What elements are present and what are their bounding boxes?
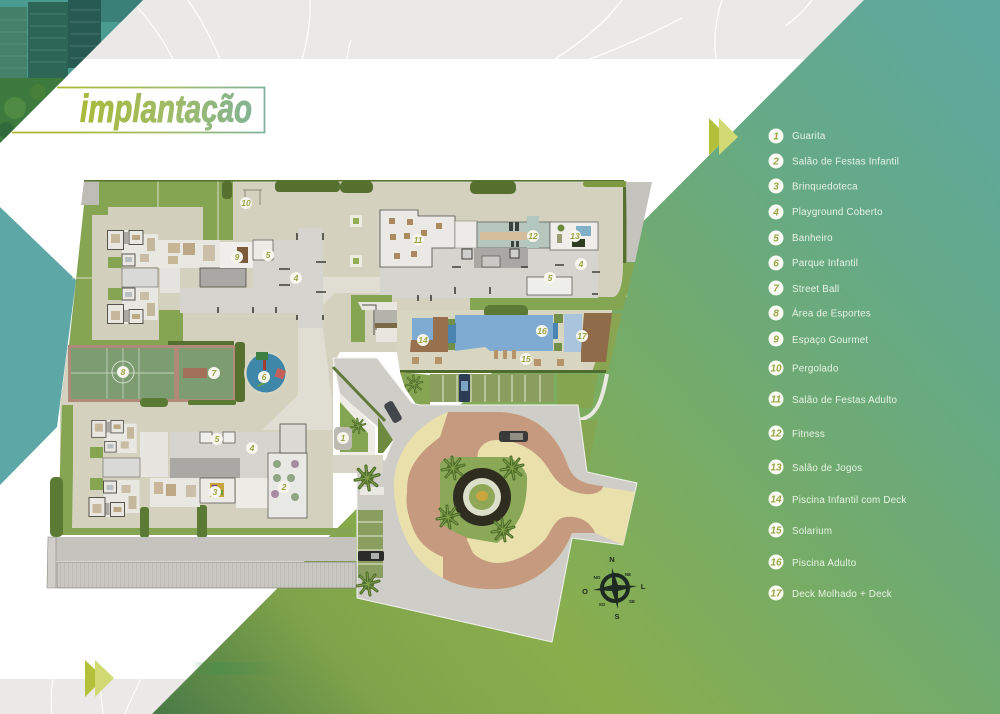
- marker 1: [337, 432, 349, 444]
- marker 12: 12: [528, 231, 538, 241]
- legend item 14: Piscina Infantil com Deck: [792, 495, 906, 506]
- bottom grey band with white contour lines: [0, 679, 190, 714]
- marker 7: 7: [212, 368, 218, 378]
- party hall adult: [380, 210, 477, 267]
- top arrows: [709, 118, 738, 155]
- pool deck: [397, 310, 612, 372]
- west core: [200, 268, 246, 287]
- compass rose: [582, 555, 646, 621]
- lawn dividers: [72, 181, 218, 278]
- bottom arrows: [85, 660, 114, 697]
- marker 1: 1: [341, 433, 346, 443]
- marker 10: [240, 197, 252, 209]
- fountain: [453, 468, 511, 526]
- pool deck south hedge: [400, 370, 606, 373]
- gourmet space: [220, 240, 273, 268]
- east bathroom: [527, 277, 572, 295]
- marker 15: [520, 353, 532, 365]
- marker 7: [208, 367, 220, 379]
- compass rose: O: [582, 587, 588, 596]
- marker 14: 14: [418, 335, 428, 345]
- legend item 8: Área de Esportes: [792, 308, 871, 320]
- marker 4 west: 4: [293, 273, 299, 283]
- game room: [550, 222, 598, 250]
- marker 2: 2: [281, 482, 287, 492]
- legend item 9: Espaço Gourmet: [792, 335, 868, 346]
- lawn and building L: [351, 295, 397, 342]
- planters north: [350, 215, 362, 267]
- lawn at parking west: [400, 372, 430, 410]
- marker 5 south: 5: [215, 434, 220, 444]
- roundabout cream paving: [394, 412, 635, 589]
- east grey strip: [626, 182, 652, 262]
- marker 17: [576, 330, 588, 342]
- legend item 17: Deck Molhado + Deck: [792, 589, 892, 600]
- darker band on panel: [192, 662, 287, 675]
- legend item 10: Pergolado: [792, 364, 839, 374]
- wet deck: [581, 313, 612, 362]
- marker 4 south: 4: [249, 443, 255, 453]
- marker 3: 3: [213, 487, 218, 497]
- tower photo corner: [0, 0, 143, 143]
- compass rose: L: [641, 582, 646, 591]
- legend item 15: [768, 522, 832, 538]
- pool hedge: [484, 305, 528, 319]
- south roof strip: [57, 562, 356, 588]
- legend item 16: 16: [770, 558, 782, 568]
- sports court: [68, 345, 236, 402]
- legend item 11: Salão de Festas Adulto: [792, 395, 898, 406]
- party hall children: [236, 424, 307, 518]
- marker 2: [278, 481, 290, 493]
- legend item 5: Banheiro: [792, 233, 833, 244]
- legend item 4: 4: [772, 208, 779, 218]
- legend item 15: Solarium: [792, 526, 832, 537]
- teal triangle left: [0, 207, 76, 485]
- walkways: [262, 277, 380, 430]
- court side hedge: [235, 342, 245, 402]
- legend item 16: [768, 554, 857, 570]
- marker 10: 10: [241, 198, 251, 208]
- right pool: [553, 314, 582, 352]
- inner west pavement: [92, 207, 203, 340]
- north boundary and hedges: [84, 180, 627, 345]
- marker 16: [536, 325, 548, 337]
- marker 16: 16: [537, 326, 547, 336]
- legend item 2: Salão de Festas Infantil: [792, 156, 899, 168]
- marker 8: [117, 366, 129, 378]
- south wing apartments: [88, 420, 200, 517]
- marker 5 south: [211, 433, 223, 445]
- legend item 7: Street Ball: [792, 284, 839, 295]
- south core: [170, 458, 240, 478]
- marker 14: [417, 334, 429, 346]
- east lawn strip: [470, 263, 635, 310]
- lawn patch east: [571, 420, 598, 470]
- legend item 6: Parque Infantil: [792, 258, 858, 269]
- legend item 5: 5: [773, 234, 779, 244]
- legend item 8: 8: [773, 308, 779, 320]
- south covered playground: [162, 432, 307, 478]
- legend item 8: [768, 306, 871, 320]
- site plan: [47, 180, 652, 642]
- legend item 17: [768, 586, 892, 600]
- legend item 3: 3: [773, 182, 779, 192]
- legend item 3: Brinquedoteca: [792, 182, 858, 192]
- compass rose: SO: [599, 602, 606, 607]
- lawn beside parking: [557, 374, 598, 408]
- legend item 11: 11: [771, 394, 782, 406]
- title: implantação: [80, 88, 252, 131]
- legend item 13: 13: [770, 462, 782, 474]
- top grey band with white contour lines: [0, 0, 880, 59]
- compass rose: NO: [594, 575, 601, 580]
- guardhouse area: [333, 367, 393, 495]
- children deck: [410, 317, 448, 352]
- legend item 7: 7: [773, 284, 779, 294]
- compass rose: N: [609, 555, 615, 564]
- west roof edge: [47, 537, 56, 588]
- column marks east: [418, 265, 600, 301]
- parking west: [358, 510, 383, 578]
- parking top: [430, 374, 554, 402]
- legend item 2: [768, 154, 899, 168]
- deck lawn: [592, 313, 622, 372]
- title box: [12, 88, 264, 132]
- side pool steps: [448, 323, 456, 343]
- legend item 13: [768, 460, 862, 474]
- legend item 12: 12: [770, 428, 782, 440]
- marker 15: 15: [521, 354, 531, 364]
- small lawn squares: [90, 257, 122, 490]
- marker 13: [569, 230, 581, 242]
- south pavement edges: [58, 405, 353, 535]
- compass rose: S: [614, 612, 620, 621]
- east playground: [380, 248, 598, 298]
- marker 6: [258, 371, 270, 383]
- plan number markers: [117, 197, 588, 498]
- west covered playground: [180, 228, 323, 328]
- legend item 3: [768, 178, 858, 194]
- south white hall: [140, 432, 168, 477]
- legend item 17: 17: [770, 588, 782, 600]
- legend item 10: 10: [770, 364, 782, 374]
- central garden: [440, 457, 527, 543]
- legend item 11: [768, 392, 898, 406]
- legend item 4: [768, 204, 883, 220]
- legend item 1: 1: [773, 132, 779, 142]
- adult pool: [455, 315, 553, 351]
- planters near pool: [448, 314, 563, 351]
- legend item 1: [768, 128, 826, 144]
- roundabout pink paving: [406, 412, 603, 589]
- deck chairs: [412, 350, 564, 366]
- corner grey box: [81, 181, 99, 205]
- compass rose: SE: [629, 599, 635, 604]
- marker 9: 9: [235, 252, 240, 262]
- marker 5 east: 5: [548, 273, 553, 283]
- legend item 16: Piscina Adulto: [792, 558, 857, 569]
- palms: [351, 376, 523, 595]
- marker 5 west: 5: [266, 250, 271, 260]
- children park: [244, 351, 288, 395]
- marker 5 west: [262, 249, 274, 261]
- legend item 12: Fitness: [792, 429, 825, 440]
- pavement base: [60, 181, 627, 528]
- marker 4 south: [246, 442, 258, 454]
- legend item 14: 14: [770, 494, 782, 506]
- legend item 1: Guarita: [792, 131, 826, 142]
- marker 17: 17: [577, 331, 588, 341]
- white curb east: [578, 374, 607, 420]
- west lawn: [69, 181, 233, 345]
- compass rose: NE: [625, 572, 631, 577]
- legend item 13: Salão de Jogos: [792, 463, 862, 474]
- marker 13: 13: [570, 231, 580, 241]
- marker 11: 11: [414, 235, 423, 245]
- lawn by wing: [159, 310, 183, 341]
- marker 4 west: [290, 272, 302, 284]
- legend item 7: [768, 280, 839, 296]
- legend item 5: [768, 230, 833, 246]
- fitness: [477, 216, 550, 248]
- legend item 4: Playground Coberto: [792, 207, 883, 218]
- marker 11: [412, 234, 424, 246]
- west wing apartments: [107, 230, 220, 324]
- east hedge line: [623, 187, 626, 263]
- legend item 2: 2: [772, 156, 779, 168]
- marker 4 east: 4: [578, 259, 584, 269]
- children pool: [412, 318, 434, 342]
- south bathroom: [200, 432, 235, 443]
- marker 3: [209, 486, 221, 498]
- legend item 10: [768, 360, 839, 376]
- marker 4 east: [575, 258, 587, 270]
- legend item 14: [768, 492, 906, 506]
- south hedges: [50, 398, 236, 538]
- legend item 12: [768, 426, 825, 440]
- pergola: [243, 190, 262, 205]
- cars: [358, 374, 528, 561]
- legend item 6: 6: [773, 258, 779, 270]
- legend item 9: 9: [773, 334, 779, 346]
- south road: [56, 537, 356, 561]
- legend: [768, 128, 906, 600]
- legend item 9: [768, 332, 868, 346]
- legend item 6: [768, 256, 858, 270]
- toy library: [200, 478, 235, 503]
- marker 5 east: [544, 272, 556, 284]
- marker 12: [527, 230, 539, 242]
- east core: [462, 248, 528, 268]
- marker 9: [231, 251, 243, 263]
- legend item 15: 15: [770, 526, 782, 536]
- marker 8: 8: [121, 367, 126, 377]
- marker 6: 6: [262, 372, 267, 382]
- column marks: [218, 233, 326, 320]
- driveway pavers: [333, 358, 637, 642]
